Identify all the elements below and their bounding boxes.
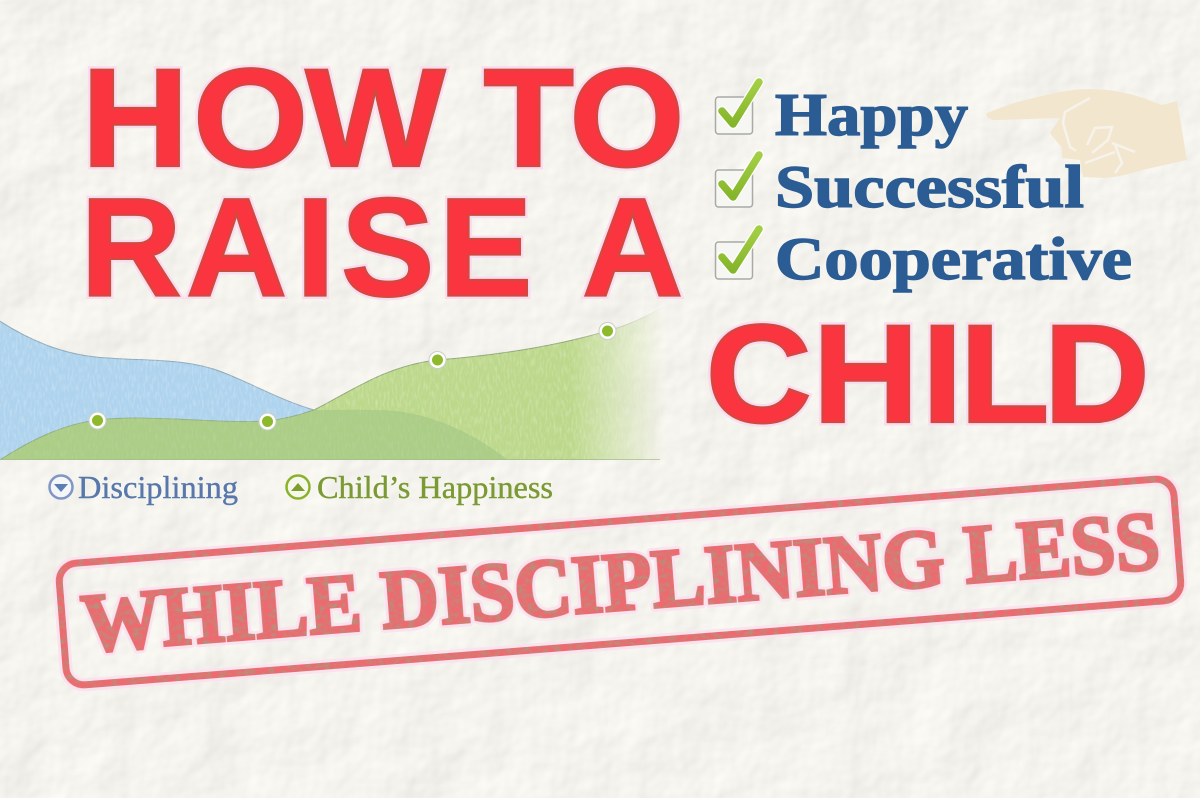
icon: pointing hand [986, 89, 1187, 178]
data point markers [89, 322, 616, 430]
stamp border halo [58, 478, 1182, 686]
item: Happy: Happy [775, 82, 968, 148]
stamp: while disciplining less [58, 478, 1182, 686]
title: Child: CHILD [706, 296, 1150, 452]
item: Happy [716, 82, 968, 148]
area chart: disciplining vs happiness [0, 298, 680, 460]
stamp border [58, 478, 1182, 686]
title: How to raise a [80, 39, 685, 326]
area: disciplining [0, 318, 314, 460]
area: child's happiness [0, 298, 680, 460]
title: How to raise a: HOW TO [82, 39, 685, 196]
chart baseline [0, 459, 660, 460]
checklist [716, 82, 1132, 292]
legend: disciplining: Disciplining [78, 469, 238, 505]
title: How to raise a: RAISE A [80, 168, 683, 326]
area: darker inner hill [0, 410, 508, 460]
item: Cooperative: Cooperative [775, 226, 1132, 292]
legend: child's happiness: Child’s Happiness [317, 469, 553, 505]
stamp text: WHILE DISCIPLINING LESS [78, 494, 1163, 671]
title: How to raise a: RAISE A [80, 168, 683, 326]
item: Successful: Successful [775, 154, 1084, 220]
title: Child: CHILD [706, 296, 1150, 452]
stamp text halo: WHILE DISCIPLINING LESS [78, 494, 1163, 671]
title: How to raise a: HOW TO [82, 39, 685, 196]
